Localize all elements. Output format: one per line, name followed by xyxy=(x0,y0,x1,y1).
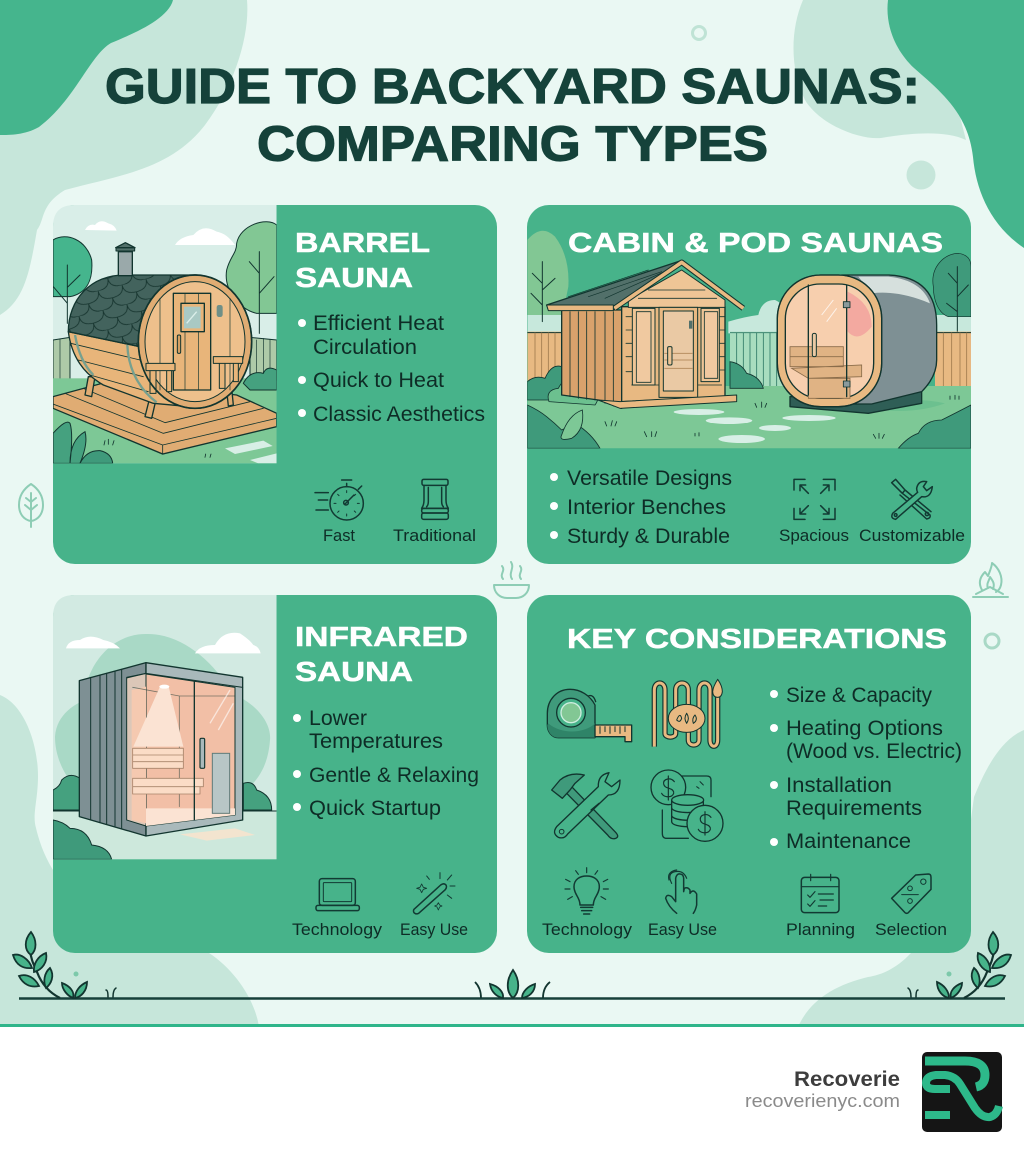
icon: selection tag xyxy=(892,874,931,913)
icon: touch hand xyxy=(666,870,697,913)
decorative ring right xyxy=(985,634,999,648)
ground line with plants xyxy=(13,932,1011,998)
title: GUIDE TO BACKYARD SAUNAS: xyxy=(105,60,920,114)
icon: leaf outline xyxy=(19,484,43,527)
chimney xyxy=(116,243,135,276)
barrel front xyxy=(138,275,252,408)
label: technology: Technology xyxy=(292,920,383,939)
title: COMPARING TYPES xyxy=(257,118,768,172)
icon: tape measure xyxy=(547,689,632,742)
key considerations bullets: Heating Options xyxy=(786,717,943,740)
plant: centre sprout xyxy=(475,970,550,998)
heading: infrared sauna: SAUNA xyxy=(295,656,413,687)
plant: left vine xyxy=(13,932,87,998)
grass xyxy=(527,386,971,448)
stepping stones xyxy=(674,409,836,443)
icon: flame outline xyxy=(973,563,1008,597)
cabin walls xyxy=(79,663,146,836)
heading: key considerations: KEY CONSIDERATIONS xyxy=(567,623,947,654)
key considerations bullets: Requirements xyxy=(786,797,922,820)
icon: spacious arrows xyxy=(794,479,835,519)
heading: infrared sauna xyxy=(295,621,468,687)
illustration: barrel sauna on deck xyxy=(53,205,277,463)
icon: planning calendar xyxy=(801,874,839,913)
cabin and pod bullets: Sturdy & Durable xyxy=(567,525,730,548)
cabin and pod bullets: Versatile Designs xyxy=(567,467,732,490)
icon: magic wand xyxy=(413,873,455,914)
infrared sauna bullets: Quick Startup xyxy=(309,797,441,820)
heading: barrel sauna: BARREL xyxy=(295,227,430,258)
barrel body xyxy=(68,332,190,407)
icon: cost and budget xyxy=(651,770,723,841)
panel: barrel sauna xyxy=(53,205,497,564)
icon: heating coil xyxy=(654,679,722,747)
key considerations bullets: Size & Capacity xyxy=(786,684,932,707)
barrel legs xyxy=(85,377,233,418)
icon: bowl with steam xyxy=(494,562,529,598)
label: planning: Planning xyxy=(786,920,855,939)
key considerations bullets: (Wood vs. Electric) xyxy=(786,740,962,763)
benches xyxy=(146,357,243,393)
panel: key considerations xyxy=(527,595,971,953)
label: technology: Technology xyxy=(542,920,633,939)
icon: hammer and wrench xyxy=(552,773,620,839)
barrel shingle roof xyxy=(68,275,195,347)
icon: customizable tools xyxy=(892,479,932,519)
label: fast: Fast xyxy=(323,526,355,545)
key considerations bullets: Installation xyxy=(786,774,892,797)
heading: barrel sauna xyxy=(295,227,430,293)
barrel sauna bullets: Circulation xyxy=(313,336,417,359)
footer band xyxy=(0,1024,1024,1154)
label: easy use: Easy Use xyxy=(400,920,468,939)
decorative ring top xyxy=(692,26,706,40)
label: easy use: Easy Use xyxy=(648,920,717,939)
footer brand name: Recoverie xyxy=(794,1068,900,1091)
footer website: recoverienyc.com xyxy=(745,1090,900,1111)
icon: fast stopwatch xyxy=(315,480,363,520)
infrared sauna bullets xyxy=(293,707,479,820)
barrel sauna bullets: Quick to Heat xyxy=(313,369,444,392)
label: spacious: Spacious xyxy=(779,526,849,545)
barrel sauna bullets: Efficient Heat xyxy=(313,312,444,335)
infrared sauna bullets: Temperatures xyxy=(309,730,443,753)
illustration: infrared cabin xyxy=(53,595,277,859)
foreground bushes and grass xyxy=(527,405,600,448)
heading: cabin and pod saunas: CABIN & POD SAUNAS xyxy=(568,227,943,258)
door xyxy=(173,293,211,390)
illustration: cabin and pod in backyard xyxy=(527,231,971,448)
label: selection: Selection xyxy=(875,920,947,939)
label: customizable: Customizable xyxy=(859,526,965,545)
cabin xyxy=(547,261,743,408)
label: traditional: Traditional xyxy=(393,526,476,545)
decorative dot right xyxy=(906,160,936,190)
icon: traditional xyxy=(422,479,448,519)
barrel sauna bullets: Classic Aesthetics xyxy=(313,403,485,426)
key considerations bullets xyxy=(770,684,962,853)
infrared sauna bullets: Gentle & Relaxing xyxy=(309,764,479,787)
title xyxy=(105,60,920,172)
fence xyxy=(527,332,971,388)
pod sauna xyxy=(777,275,937,413)
barrel sauna bullets xyxy=(298,312,485,426)
logo xyxy=(922,1052,1002,1132)
key considerations bullets: Maintenance xyxy=(786,830,911,853)
heading: infrared sauna: INFRARED xyxy=(295,621,468,652)
stepping stones and plants xyxy=(225,441,277,463)
cabin and pod bullets xyxy=(550,467,732,548)
panel: cabin and pod saunas xyxy=(527,205,971,564)
infrared sauna bullets: Lower xyxy=(309,707,367,730)
heading: barrel sauna: SAUNA xyxy=(295,262,413,293)
icon: laptop xyxy=(316,879,359,911)
cabin and pod bullets: Interior Benches xyxy=(567,496,726,519)
panel: infrared sauna xyxy=(53,595,497,953)
bushes xyxy=(527,362,763,400)
plant: right vine xyxy=(937,932,1011,998)
icon: light bulb xyxy=(565,868,608,914)
benches xyxy=(133,748,203,794)
